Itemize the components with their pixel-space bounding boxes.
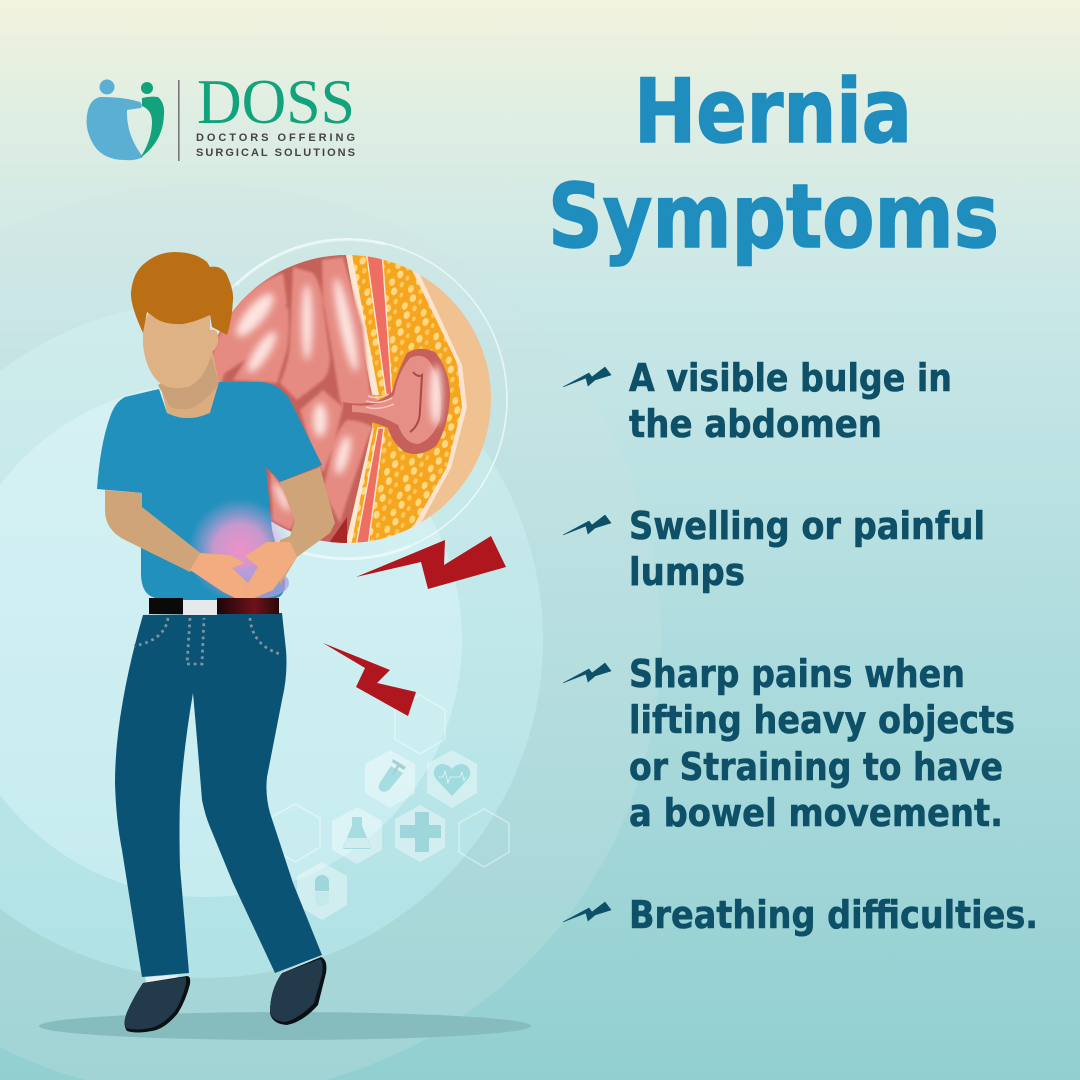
logo wordmark: DOSS	[197, 67, 355, 137]
wall lining	[346, 255, 379, 543]
bullet icon	[563, 663, 611, 683]
belt	[149, 598, 279, 615]
bullet 2: Swelling or painful	[629, 504, 985, 548]
magnified hernia cross-section	[187, 239, 507, 559]
icon: cross	[395, 805, 445, 862]
herniated sac	[343, 349, 450, 454]
bullet 4: Breathing difficulties.	[629, 893, 1038, 937]
head	[143, 310, 218, 388]
bullet 1: the abdomen	[629, 402, 882, 446]
bullet 1	[563, 356, 952, 446]
bullet icon	[563, 902, 611, 922]
t-shirt	[97, 382, 322, 602]
lightning bolt upper	[356, 536, 506, 589]
fat layer	[340, 250, 462, 548]
left arm	[105, 490, 203, 572]
lightning bolt lower	[323, 643, 416, 716]
bullet 1: A visible bulge in	[629, 356, 952, 400]
title line 1: Hernia	[634, 60, 912, 163]
right shoe	[270, 957, 326, 1025]
intestine highlights	[231, 277, 362, 513]
hair	[131, 252, 233, 335]
muscle strip upper	[366, 250, 392, 395]
title line 2: Symptoms	[548, 165, 999, 268]
socks	[145, 960, 314, 986]
bullet icon	[563, 515, 611, 535]
left shoe	[124, 976, 190, 1032]
icon: flask	[332, 807, 382, 864]
figure: man holding abdomen	[97, 252, 335, 1032]
logo tagline line 1: DOCTORS OFFERING	[196, 132, 355, 144]
bullet icon	[563, 367, 611, 387]
bullet 3: Sharp pains when	[629, 652, 965, 696]
hexagon medical icons	[270, 695, 509, 920]
trouser stitching	[134, 618, 280, 664]
muscle strip lower	[356, 428, 384, 546]
ground shadow	[39, 1012, 531, 1040]
lens contents	[200, 250, 495, 550]
bullet 2: lumps	[629, 550, 745, 594]
logo: DOSS	[87, 67, 355, 161]
bullet 3	[563, 652, 1015, 835]
bullet 3: or Straining to have	[629, 745, 1003, 789]
bullet 3: lifting heavy objects	[629, 698, 1015, 742]
bullet 2	[563, 504, 985, 594]
icon: pill	[297, 862, 347, 920]
bullet list	[563, 356, 1038, 937]
left hand	[190, 553, 248, 603]
icon: logo figures	[87, 80, 164, 160]
right arm	[280, 467, 335, 585]
trousers	[115, 613, 322, 977]
right hand	[245, 542, 297, 602]
intestines	[200, 250, 387, 546]
lens ring	[187, 239, 507, 559]
title	[548, 60, 999, 268]
abdomen lower glow	[221, 567, 289, 599]
skin strip	[412, 270, 467, 527]
icon: syringe	[365, 750, 415, 808]
neck	[161, 350, 219, 418]
logo tagline line 2: SURGICAL SOLUTIONS	[196, 147, 355, 159]
icon: heart	[427, 750, 477, 808]
hexagon outlines	[270, 695, 509, 867]
glow on abdomen	[188, 498, 292, 602]
neck shadow	[158, 352, 219, 409]
bullet 3: a bowel movement.	[629, 791, 1003, 835]
